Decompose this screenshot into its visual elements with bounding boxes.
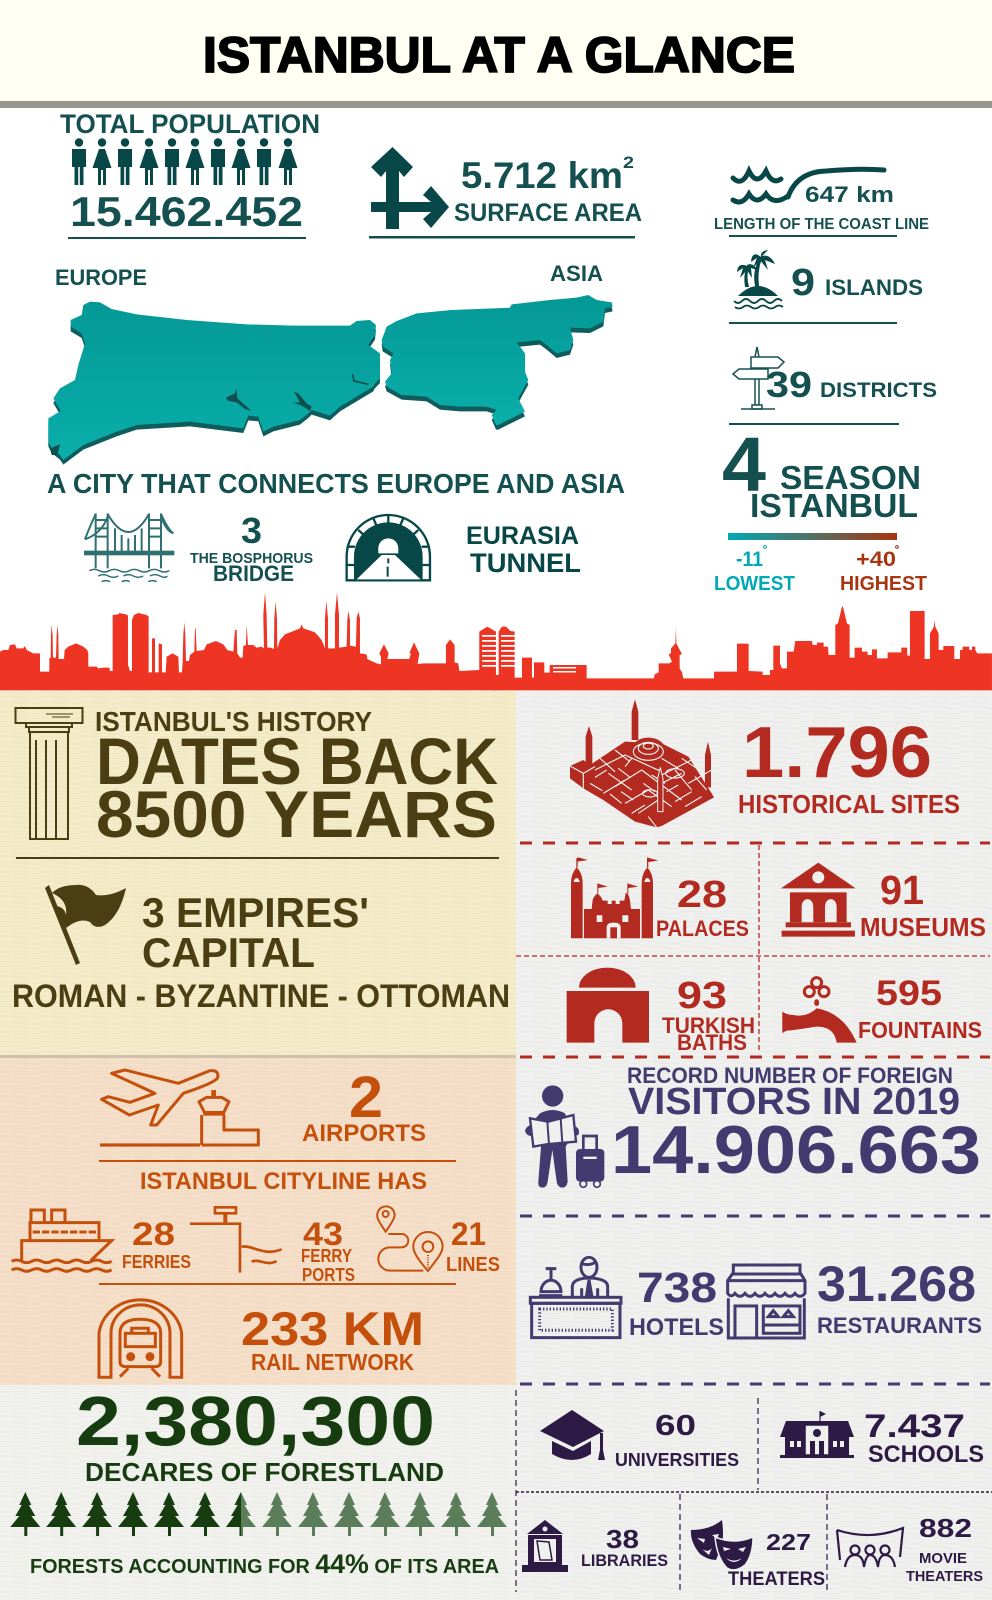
degree low xyxy=(764,546,766,548)
eurasia label: EURASIA xyxy=(466,522,579,550)
theaters label: THEATERS xyxy=(728,1569,825,1590)
heading: total population: TOTAL POPULATION xyxy=(60,109,320,139)
title: ISTANBUL AT A GLANCE xyxy=(203,27,795,83)
icon: library xyxy=(522,1520,568,1572)
visitors number: 14.906.663 xyxy=(611,1112,981,1188)
museums label: MUSEUMS xyxy=(860,912,986,942)
ports label line one: FERRY xyxy=(301,1246,352,1266)
panel: total population xyxy=(60,109,320,239)
bridge label line one: THE BOSPHORUS xyxy=(190,550,313,567)
baths label line two: BATHS xyxy=(677,1030,747,1055)
header band xyxy=(0,0,992,108)
restaurants number: 31.268 xyxy=(817,1256,976,1312)
panel: transportation xyxy=(0,1055,516,1385)
icon: theatre masks xyxy=(691,1520,753,1570)
museums number: 91 xyxy=(880,867,924,913)
highest label: HIGHEST xyxy=(840,573,927,595)
coast label: LENGTH OF THE COAST LINE xyxy=(714,216,929,233)
icon: route pins xyxy=(377,1206,443,1271)
icon: historic peninsula xyxy=(570,699,714,827)
icon: turkish bath xyxy=(567,968,649,1043)
icon: classical column xyxy=(16,708,82,839)
coast length: 647 km xyxy=(805,182,894,207)
icon: tourist with map and suitcase xyxy=(525,1085,604,1188)
bridge count: 3 xyxy=(241,510,262,551)
hotels number: 738 xyxy=(637,1264,717,1312)
icon: hotel reception xyxy=(530,1257,621,1338)
bridge label line two: BRIDGE xyxy=(213,561,294,586)
restaurants label: RESTAURANTS xyxy=(817,1313,982,1338)
highest temperature: +40 xyxy=(856,548,896,571)
population number: 15.462.452 xyxy=(70,188,303,235)
lowest label: LOWEST xyxy=(714,573,795,595)
universities label: UNIVERSITIES xyxy=(615,1450,739,1470)
palaces label: PALACES xyxy=(656,916,749,941)
dates back: DATES BACK xyxy=(96,724,498,798)
panel: forests xyxy=(0,1382,516,1600)
movie theaters line one: MOVIE xyxy=(919,1550,967,1567)
icon: ferry port xyxy=(190,1207,282,1273)
historical sites label: HISTORICAL SITES xyxy=(738,789,960,819)
rail label: RAIL NETWORK xyxy=(251,1349,414,1375)
degree high xyxy=(896,546,898,548)
districts number: 39 xyxy=(766,364,812,405)
icon: flag xyxy=(45,885,126,965)
panel: districts xyxy=(729,347,937,425)
lines number: 21 xyxy=(451,1216,486,1252)
schools label: SCHOOLS xyxy=(868,1441,984,1468)
istanbul label: ISTANBUL xyxy=(750,487,918,524)
icon: waves and coast xyxy=(733,169,884,202)
lowest temperature: -11 xyxy=(736,548,763,571)
lines label: LINES xyxy=(446,1254,500,1276)
forest area label: DECARES OF FORESTLAND xyxy=(85,1457,444,1487)
icon: train in tunnel xyxy=(99,1300,182,1377)
panel: islands xyxy=(729,250,923,324)
empires list: ROMAN - BYZANTINE - OTTOMAN xyxy=(12,978,510,1014)
surface area label: SURFACE AREA xyxy=(454,199,642,227)
panel: history xyxy=(0,691,516,1055)
fountains label: FOUNTAINS xyxy=(858,1017,982,1043)
empires heading: 3 EMPIRES' xyxy=(142,889,369,936)
fountains number: 595 xyxy=(876,974,942,1013)
icon: suspension bridge xyxy=(85,513,173,582)
icon: tunnel xyxy=(347,515,430,580)
theaters number: 227 xyxy=(766,1529,811,1555)
8500 years: 8500 YEARS xyxy=(96,777,497,851)
ferries number: 28 xyxy=(132,1216,175,1252)
icon: perpendicular arrows xyxy=(371,147,449,229)
historical sites number: 1.796 xyxy=(742,713,932,793)
districts label: DISTRICTS xyxy=(820,379,937,402)
visitors line two: VISITORS IN 2019 xyxy=(628,1081,960,1123)
season label: SEASON xyxy=(780,459,921,496)
islands number: 9 xyxy=(791,262,815,304)
schools number: 7.437 xyxy=(864,1408,965,1444)
map: european side xyxy=(48,302,380,465)
panel: coast line xyxy=(714,169,929,237)
icon: school building xyxy=(780,1411,854,1458)
panel: heritage and tourism column xyxy=(516,691,992,1600)
baths number: 93 xyxy=(677,975,727,1017)
airports number: 2 xyxy=(349,1065,383,1130)
airports label: AIRPORTS xyxy=(302,1120,426,1147)
icon: palace xyxy=(571,857,658,938)
icon: row of trees xyxy=(10,1492,507,1536)
tunnel label: TUNNEL xyxy=(470,548,581,578)
ports label line two: PORTS xyxy=(302,1265,355,1285)
rail length: 233 KM xyxy=(241,1302,424,1355)
ports number: 43 xyxy=(303,1216,343,1252)
panel: seasons and temperature xyxy=(714,422,927,595)
islands label: ISLANDS xyxy=(825,275,923,300)
icon: row of people xyxy=(72,138,298,185)
panel: surface area xyxy=(369,147,642,238)
europe label: EUROPE xyxy=(55,265,147,290)
capital heading: CAPITAL xyxy=(142,929,315,976)
libraries label: LIBRARIES xyxy=(581,1551,668,1570)
map: asian side xyxy=(382,295,613,430)
surface area value: 5.712 km xyxy=(461,155,623,196)
forest share sentence: FORESTS ACCOUNTING FOR 44% OF ITS AREA xyxy=(30,1549,499,1579)
history heading small: ISTANBUL'S HISTORY xyxy=(95,706,372,737)
hotels label: HOTELS xyxy=(629,1314,724,1341)
icon: signpost xyxy=(733,347,784,409)
icon: museum xyxy=(781,863,856,937)
baths label line one: TURKISH xyxy=(662,1013,755,1038)
number 4: 4 xyxy=(722,422,766,508)
icon: restaurant storefront xyxy=(728,1265,805,1338)
cityline heading: ISTANBUL CITYLINE HAS xyxy=(140,1168,427,1195)
icon: graduation cap xyxy=(540,1410,605,1460)
forest area number: 2,380,300 xyxy=(76,1382,435,1460)
city skyline xyxy=(0,592,992,690)
visitors line one: RECORD NUMBER OF FOREIGN xyxy=(627,1063,953,1088)
temperature gradient bar xyxy=(728,533,897,540)
palaces number: 28 xyxy=(677,874,727,916)
superscript: 2 xyxy=(623,153,634,172)
icon: plane and tower xyxy=(100,1070,258,1145)
icon: fountain tap xyxy=(782,978,857,1043)
movie theaters number: 882 xyxy=(919,1513,972,1543)
icon: palm island xyxy=(734,250,783,308)
ferries label: FERRIES xyxy=(122,1252,191,1272)
connects heading: A CITY THAT CONNECTS EUROPE AND ASIA xyxy=(47,468,625,499)
icon: ferry xyxy=(12,1210,112,1271)
universities number: 60 xyxy=(655,1410,696,1442)
icon: movie screen and audience xyxy=(837,1528,903,1567)
libraries number: 38 xyxy=(606,1524,639,1554)
asia label: ASIA xyxy=(550,261,603,286)
movie theaters line two: THEATERS xyxy=(906,1568,983,1585)
